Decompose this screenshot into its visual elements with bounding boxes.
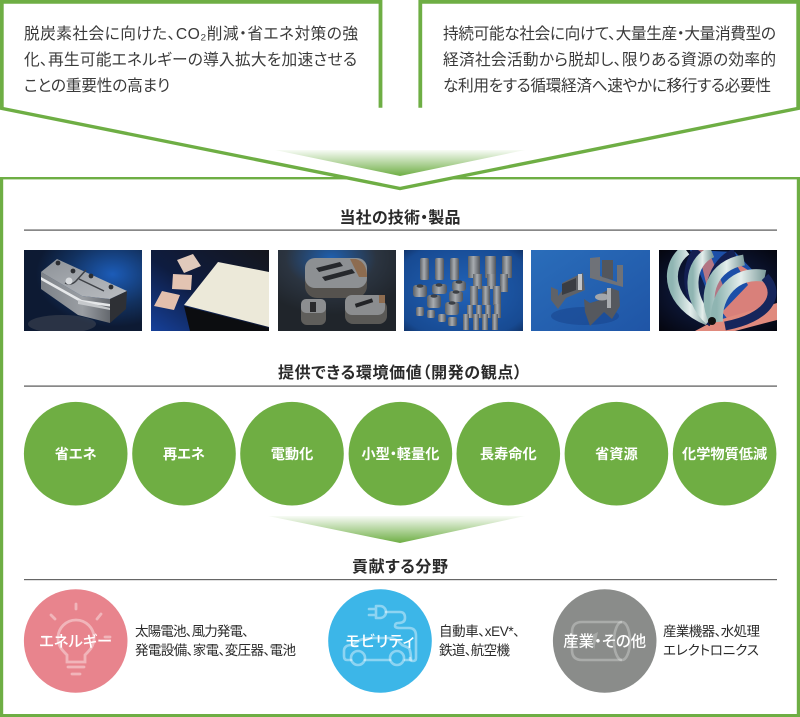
circle: renewable energy bbox=[132, 402, 236, 506]
circle: resource saving bbox=[565, 402, 668, 506]
circle: energy field: エネルギー bbox=[39, 632, 112, 650]
panel: circular economy box bbox=[420, 2, 798, 108]
photo: wound cut cores bbox=[278, 250, 396, 331]
icon: electric car and plug bbox=[344, 606, 416, 665]
heading: environmental values: 提供できる環境価値（開発の観点） bbox=[278, 363, 522, 382]
photo: ferrite E cores bbox=[531, 250, 650, 331]
text: mobility field examples: 鉄道、航空機 bbox=[439, 643, 510, 658]
circle: miniaturization and weight reduction bbox=[349, 402, 452, 506]
circle: electrification bbox=[240, 402, 344, 506]
circle: energy field bbox=[24, 589, 128, 693]
text: industry field examples bbox=[663, 624, 760, 658]
panel: decarbonization box bbox=[2, 2, 381, 108]
icon: light bulb bbox=[43, 604, 110, 674]
text: decarbonization background: 化、再生可能エネルギーの導入拡大を加速させる bbox=[24, 50, 357, 69]
text: energy field examples: 発電設備、家電、変圧器、電池 bbox=[135, 643, 296, 658]
circle: electrification: 電動化 bbox=[271, 446, 313, 463]
photo: metal ribbon coil bbox=[659, 250, 777, 331]
text: decarbonization background: 脱炭素社会に向けた、CO₂削減・省エネ対策の強 bbox=[24, 25, 358, 43]
circle: mobility field bbox=[328, 589, 432, 693]
arrow: lower gradient triangle bbox=[268, 516, 525, 543]
circle: miniaturization and weight reduction: 小型・軽量化 bbox=[361, 447, 439, 463]
photo: ferrite cylinders and rings bbox=[404, 250, 523, 331]
circle: energy saving: 省エネ bbox=[55, 446, 97, 463]
circle: resource saving: 省資源 bbox=[595, 446, 638, 463]
text: energy field examples bbox=[135, 624, 296, 658]
arrow: chevron line bbox=[0, 108, 800, 188]
circle: long life: 長寿命化 bbox=[480, 446, 537, 463]
circle: industry and other field bbox=[553, 589, 656, 693]
text: energy field examples: 太陽電池、風力発電、 bbox=[135, 624, 249, 639]
circle: chemical reduction: 化学物質低減 bbox=[682, 446, 767, 463]
text: industry field examples: エレクトロニクス bbox=[663, 643, 759, 658]
text: decarbonization background: ことの重要性の高まり bbox=[24, 77, 170, 95]
text: decarbonization background bbox=[24, 25, 358, 95]
heading: contributing fields: 貢献する分野 bbox=[352, 558, 448, 576]
icon: cylinder with arrow bbox=[572, 622, 630, 660]
arrow: top gradient triangle bbox=[275, 150, 525, 176]
text: circular economy background bbox=[443, 25, 776, 95]
text: circular economy background: な利用をする循環経済へ速やかに移行する必要性 bbox=[443, 77, 771, 95]
circle: energy saving bbox=[24, 402, 128, 506]
photo: ceramic sheet and squares bbox=[151, 250, 269, 331]
heading: technologies and products: 当社の技術・製品 bbox=[340, 208, 460, 227]
circle: renewable energy: 再エネ bbox=[163, 447, 205, 463]
panel: main frame bbox=[0, 177, 800, 717]
circle: mobility field: モビリティ bbox=[346, 632, 415, 650]
text: industry field examples: 産業機器、水処理 bbox=[663, 624, 760, 639]
circle: chemical reduction bbox=[673, 402, 776, 506]
photo: metal machined part bbox=[24, 250, 142, 333]
text: circular economy background: 持続可能な社会に向けて、大量生産・大量消費型の bbox=[443, 25, 776, 43]
circle: industry and other field: 産業・その他 bbox=[563, 632, 646, 650]
text: circular economy background: 経済社会活動から脱却し、限りある資源の効率的 bbox=[443, 51, 776, 69]
circle: long life bbox=[456, 402, 560, 506]
text: mobility field examples: 自動車、xEV*、 bbox=[439, 624, 520, 639]
text: mobility field examples bbox=[439, 624, 520, 658]
